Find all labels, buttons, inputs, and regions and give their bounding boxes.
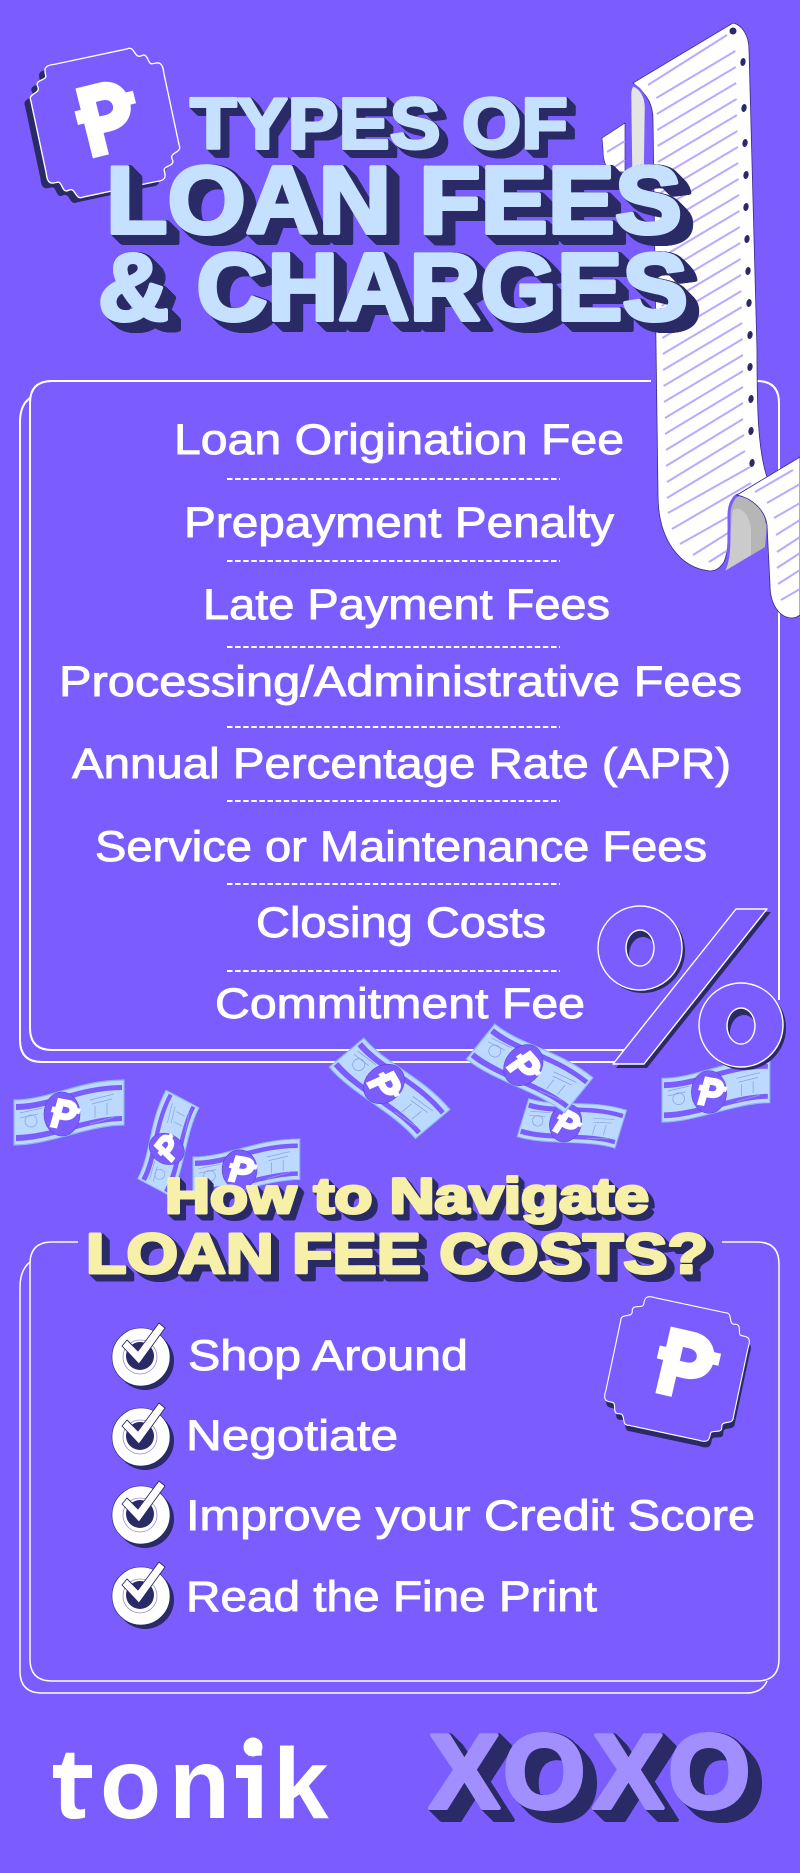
icon: money bill behind heading [193, 1139, 300, 1198]
back flap of receipt [602, 123, 625, 172]
item: shop around: Shop Around [188, 1332, 468, 1380]
list: types of loan fees [59, 416, 742, 1028]
panel: loan fee list frame [20, 381, 779, 1062]
icon: money bill upper right [466, 1009, 593, 1128]
icon: money bill lower right [517, 1082, 627, 1165]
logo: xoxo: XOXO [429, 1713, 750, 1831]
fee: processing: Processing/Administrative Fees [59, 658, 742, 706]
inner fold at top [630, 85, 646, 175]
receipt ruled lines [648, 35, 751, 562]
icon: money bill far right [662, 1059, 770, 1122]
item: improve credit score: Improve your Credit Score [186, 1492, 755, 1540]
item: shop around [112, 1323, 468, 1390]
icon: peso coin badge bottom [598, 1291, 757, 1453]
icon: money bill left [14, 1080, 124, 1145]
panel: how to navigate frame [20, 1242, 779, 1693]
icon: percent sign [598, 906, 786, 1070]
item: negotiate [112, 1403, 398, 1470]
fee: commitment: Commitment Fee [215, 980, 585, 1028]
fee: loan origination: Loan Origination Fee [174, 416, 624, 464]
icon: money bill centre [329, 1025, 450, 1151]
item: read fine print [112, 1562, 597, 1629]
item: read fine print: Read the Fine Print [186, 1573, 597, 1621]
fee: closing: Closing Costs [256, 899, 546, 947]
lower strip ruled lines [755, 470, 800, 600]
heading: loan fee costs: LOAN FEE COSTS? [86, 1222, 708, 1286]
item: negotiate: Negotiate [186, 1412, 398, 1460]
fee: service: Service or Maintenance Fees [95, 823, 707, 871]
fee: apr: Annual Percentage Rate (APR) [72, 740, 731, 788]
heading: loan fees: LOAN FEES [106, 147, 682, 254]
grey underside of curl [723, 495, 767, 572]
heading: types of: TYPES OF [190, 84, 568, 164]
item: improve credit score [112, 1481, 755, 1548]
icon: money bill vertical [123, 1090, 214, 1196]
heading: and charges: & CHARGES [98, 234, 688, 341]
fee: late payment: Late Payment Fees [203, 581, 610, 629]
receipt punch holes [730, 28, 755, 467]
fee: prepayment penalty: Prepayment Penalty [184, 499, 615, 547]
logo: tonik: tonik [53, 1728, 329, 1840]
checklist [112, 1323, 755, 1629]
receipt lower strip [737, 457, 800, 618]
icon: peso coin badge top [18, 42, 187, 209]
receipt main sheet [633, 23, 767, 571]
heading: how to navigate: How to Navigate [165, 1168, 649, 1224]
icon: paper receipt scroll [602, 23, 800, 618]
